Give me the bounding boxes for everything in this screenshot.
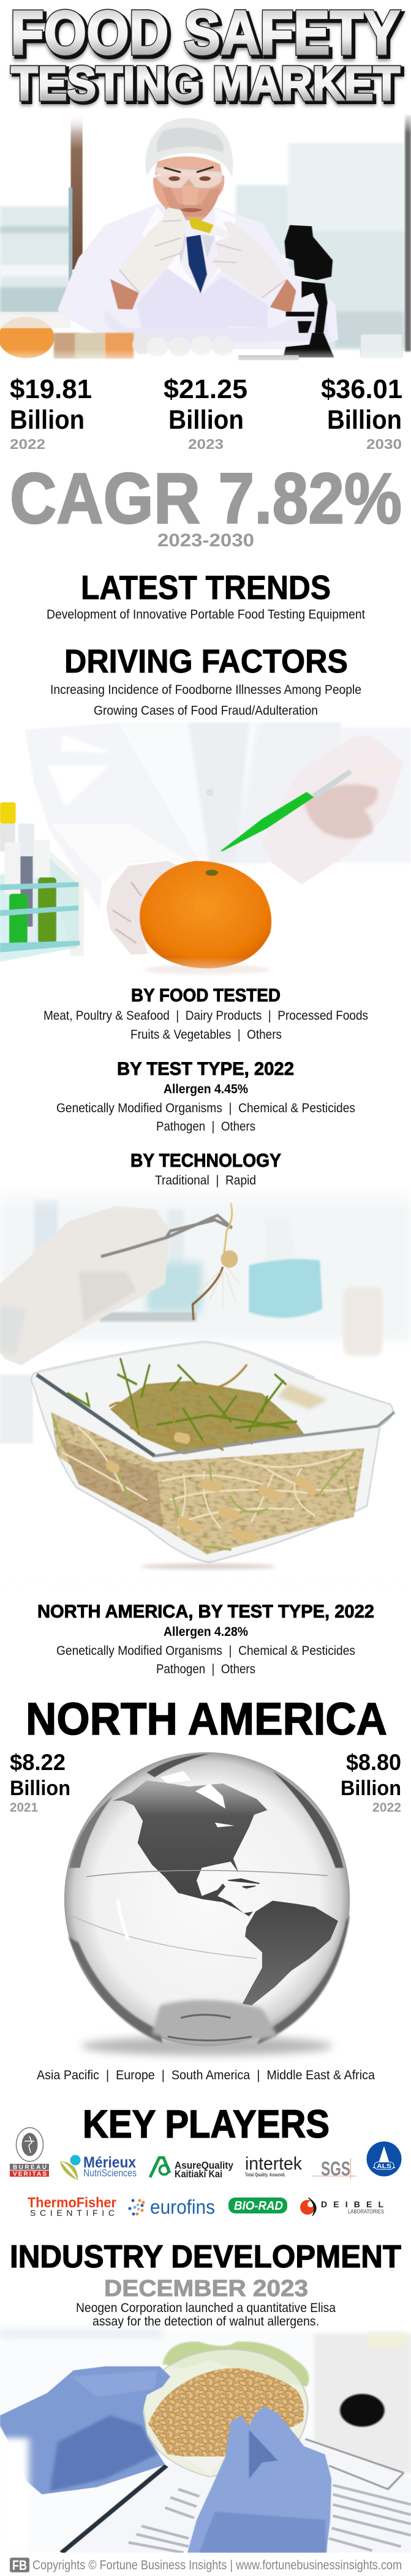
glass globe — [64, 1752, 350, 2055]
collar shirt — [178, 232, 215, 265]
left glove — [119, 208, 187, 293]
tweezers — [101, 1215, 232, 1257]
logo: ALS — [366, 2141, 402, 2177]
logo: Eurofins: eurofins — [150, 2196, 215, 2218]
logo: Intertek: intertek — [245, 2153, 303, 2174]
photo: gloved hands testing an orange — [0, 723, 411, 984]
right hand — [187, 2406, 331, 2553]
north america value 2021: 2021 — [10, 1801, 38, 1815]
logo: Merieux NutriSciences: Mérieux — [83, 2154, 136, 2171]
logo: Bureau Veritas: BUREAU — [13, 2164, 47, 2171]
globe seams and highlights — [67, 1870, 328, 1959]
photo: sprouts in a glass dish — [0, 1181, 411, 1562]
green leaves behind dish — [162, 2341, 309, 2387]
logo: Bio-Rad: BIO-RAD — [234, 2199, 283, 2213]
heading: north america: NORTH AMERICA — [26, 1693, 387, 1744]
sprout held by tweezers — [193, 1203, 240, 1320]
test tube rack — [0, 802, 84, 962]
coat — [25, 723, 341, 910]
development text line 2: assay for the detection of walnut allergens. — [92, 2314, 319, 2329]
logo: Merieux NutriSciences: NutriSciences — [83, 2167, 137, 2179]
document on clipboard — [60, 2438, 411, 2553]
pen — [62, 2466, 167, 2553]
driving factor 2: Growing Cases of Food Fraud/Adulteration — [94, 704, 318, 718]
hudson bay and arctic ice — [160, 1771, 235, 1827]
petri dish — [143, 2349, 308, 2477]
caribbean islands — [228, 1879, 260, 1888]
clipboard clip — [306, 2439, 404, 2489]
logo: Merieux NutriSciences — [60, 2154, 137, 2180]
right glove — [211, 222, 286, 299]
microscope — [283, 225, 334, 358]
logo: AsureQuality Kaitiaki Kai — [150, 2158, 233, 2180]
logo: Deibel Laboratories — [300, 2198, 384, 2216]
north america — [113, 1780, 267, 1916]
glass dish — [31, 1342, 394, 1562]
logo: Deibel Laboratories: DEIBEL — [321, 2199, 383, 2209]
other regions: Asia Pacific | Europe | South America | Middle East & Africa — [37, 2068, 375, 2082]
heading: by test type: BY TEST TYPE, 2022 — [117, 1059, 294, 1079]
north america value 2021: $8.22 — [10, 1750, 66, 1775]
allergen share: Allergen 4.45% — [164, 1082, 248, 1096]
logo: Bureau Veritas — [10, 2128, 49, 2178]
logo: Thermo Fisher Scientific: SCIENTIFIC — [30, 2208, 115, 2218]
hair net — [145, 118, 233, 178]
logo: Intertek: Total Quality. Assured. — [245, 2172, 285, 2178]
north america segments line 1: Genetically Modified Organisms | Chemical & Pesticides — [56, 1644, 355, 1658]
north america value 2022 — [341, 1750, 401, 1815]
sprouts — [53, 1359, 355, 1550]
market size 2030: Billion — [327, 405, 402, 435]
head — [153, 156, 224, 220]
driving factor 1: Increasing Incidence of Foodborne Illnesses Among People — [50, 683, 361, 697]
logo: AsureQuality Kaitiaki Kai: Kaitiaki Kai — [175, 2168, 222, 2180]
title — [10, 0, 402, 113]
logo: Bureau Veritas: VERITAS — [13, 2171, 47, 2178]
north america value 2022: $8.80 — [346, 1750, 401, 1775]
logo: ALS: ALS — [377, 2163, 391, 2170]
left hand — [0, 2367, 170, 2495]
heading: by technology: BY TECHNOLOGY — [130, 1150, 281, 1171]
north america allergen share: Allergen 4.28% — [164, 1625, 248, 1639]
test tube — [190, 217, 237, 241]
CAGR period: 2023-2030 — [157, 530, 254, 551]
logo: Thermo Fisher Scientific: ThermoFisher — [28, 2194, 116, 2210]
north america value 2021 — [10, 1750, 70, 1815]
north america segments line 2: Pathogen | Others — [156, 1662, 255, 1676]
heading: latest trends: LATEST TRENDS — [81, 568, 331, 606]
grapefruit and jars — [0, 312, 134, 359]
tie — [186, 235, 207, 293]
forearms — [110, 279, 296, 313]
heading: driving factors: DRIVING FACTORS — [64, 643, 348, 680]
market size 2022 — [10, 374, 92, 452]
market size 2030: 2030 — [366, 436, 402, 452]
market size 2030 — [321, 374, 402, 452]
heading: key players: KEY PLAYERS — [83, 2102, 330, 2146]
development date: DECEMBER 2023 — [104, 2276, 308, 2302]
food tested segments line 2: Fruits & Vegetables | Others — [130, 1028, 282, 1042]
market size 2030: $36.01 — [321, 374, 402, 404]
footer logo: FB — [12, 2558, 27, 2573]
logo: SGS: SGS — [321, 2158, 350, 2180]
market size 2023: 2023 — [188, 436, 224, 452]
orange — [140, 861, 271, 975]
north america value 2021: Billion — [10, 1777, 70, 1800]
left glove — [106, 861, 178, 955]
latest trend text: Development of Innovative Portable Food Testing Equipment — [47, 608, 365, 622]
market size 2022: Billion — [10, 405, 85, 435]
footer bar — [0, 2553, 411, 2576]
north america value 2022: 2022 — [372, 1801, 401, 1815]
black bottle cap — [340, 2394, 385, 2427]
food tested segments line 1: Meat, Poultry & Seafood | Dairy Products | Processed Foods — [43, 1009, 368, 1023]
market size 2022: $19.81 — [10, 374, 92, 404]
eggs and petri dish — [132, 334, 402, 360]
glove — [0, 1206, 169, 1365]
lab coat — [58, 204, 338, 349]
dish shadow and fade — [0, 1562, 411, 1590]
test type segments line 1: Genetically Modified Organisms | Chemical & Pesticides — [56, 1101, 355, 1115]
technology segments: Traditional | Rapid — [155, 1173, 256, 1188]
market size 2023: Billion — [168, 405, 244, 435]
north america value 2022: Billion — [341, 1777, 401, 1800]
heading: industry development: INDUSTRY DEVELOPMENT — [10, 2239, 401, 2275]
development text line 1: Neogen Corporation launched a quantitative Elisa — [76, 2301, 336, 2315]
logo: Deibel Laboratories: LABORATORIES — [348, 2209, 384, 2215]
market size 2023: $21.25 — [164, 374, 247, 404]
south america — [243, 1900, 338, 2005]
heading: by food tested: BY FOOD TESTED — [131, 985, 281, 1006]
heading: north america by test type: NORTH AMERICA, BY TEST TYPE, 2022 — [37, 1602, 374, 1622]
right glove and pipette — [220, 736, 404, 884]
goggles — [156, 167, 222, 188]
market size 2022: 2022 — [10, 436, 45, 452]
market size 2023 — [164, 374, 247, 452]
logo: AsureQuality Kaitiaki Kai: AsureQuality — [175, 2160, 233, 2171]
hero photo: food scientist with test tube and microscope — [0, 113, 411, 367]
photo: blue-gloved hands with petri dish of oats — [0, 2319, 411, 2553]
test type segments line 2: Pathogen | Others — [156, 1120, 255, 1134]
logo: Thermo Fisher Scientific — [28, 2194, 116, 2218]
